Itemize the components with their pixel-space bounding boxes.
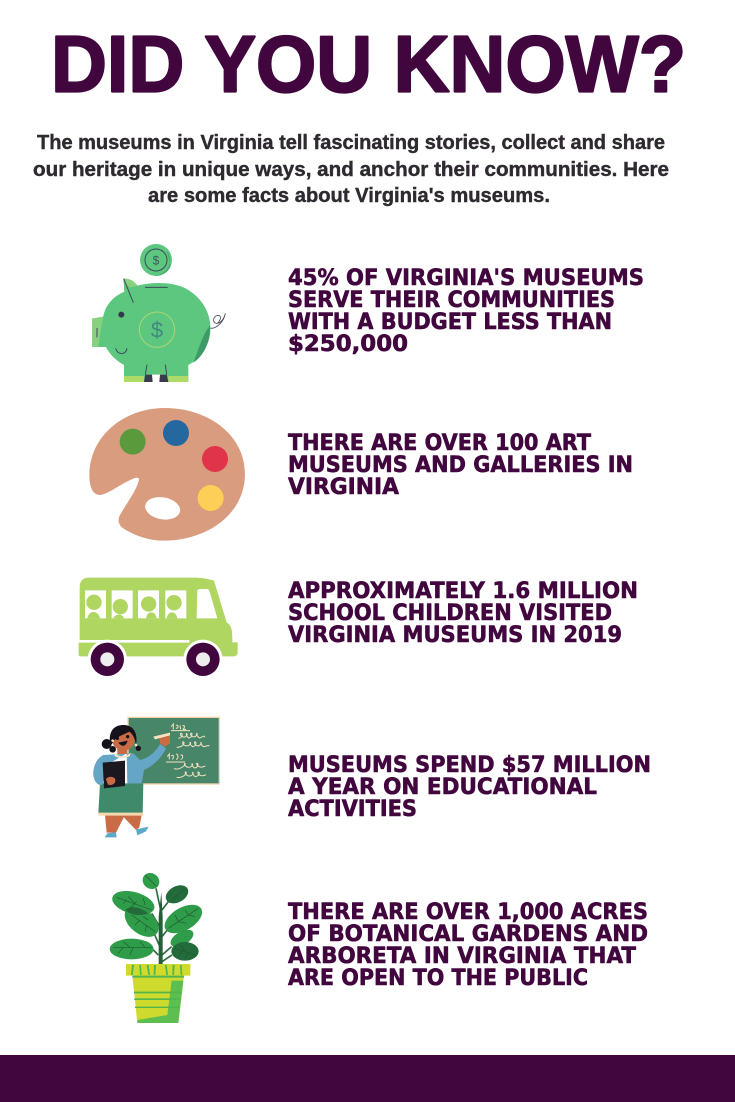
fact: school children	[288, 579, 638, 648]
fact: art museums: MUSEUMS AND GALLERIES IN	[288, 453, 633, 478]
intro text block	[33, 132, 669, 207]
fact: education spending	[288, 753, 651, 822]
fact: education spending: A YEAR ON EDUCATIONAL	[288, 775, 597, 800]
title: DID YOU KNOW?	[51, 20, 686, 108]
fact: budget: WITH A BUDGET LESS THAN	[288, 310, 612, 335]
fact: botanical gardens	[288, 900, 648, 991]
icon: school bus	[79, 578, 238, 679]
fact: school children: SCHOOL CHILDREN VISITED	[288, 601, 612, 626]
icon: potted plant	[110, 870, 207, 1023]
fact: budget: 45% OF VIRGINIA'S MUSEUMS	[288, 266, 644, 291]
fact: budget: SERVE THEIR COMMUNITIES	[288, 288, 615, 313]
footer band	[0, 1055, 735, 1102]
fact: botanical gardens: ARE OPEN TO THE PUBLIC	[288, 966, 588, 991]
fact: education spending: ACTIVITIES	[288, 797, 417, 822]
icon: piggy bank	[92, 244, 225, 382]
intro text block: are some facts about Virginia's museums.	[148, 185, 550, 207]
fact: school children: VIRGINIA MUSEUMS IN 2019	[288, 623, 622, 648]
fact: botanical gardens: OF BOTANICAL GARDENS AND	[288, 922, 648, 947]
fact: art museums: THERE ARE OVER 100 ART	[288, 431, 591, 456]
fact: botanical gardens: THERE ARE OVER 1,000 ACRES	[288, 900, 648, 925]
fact: school children: APPROXIMATELY 1.6 MILLION	[288, 579, 638, 604]
fact: art museums: VIRGINIA	[288, 475, 399, 500]
fact: budget: $250,000	[288, 332, 408, 357]
fact: education spending: MUSEUMS SPEND $57 MILLION	[288, 753, 651, 778]
fact: botanical gardens: ARBORETA IN VIRGINIA THAT	[288, 944, 636, 969]
intro text block: The museums in Virginia tell fascinating stories, collect and share	[37, 132, 665, 154]
fact: budget	[288, 266, 644, 357]
fact: art museums	[288, 431, 633, 500]
intro text block: our heritage in unique ways, and anchor their communities. Here	[33, 159, 669, 181]
icon: paint palette	[89, 408, 245, 541]
icon: piggy bank: $	[151, 317, 163, 342]
icon: teacher at chalkboard	[93, 717, 219, 837]
icon: piggy bank: $	[153, 253, 160, 267]
